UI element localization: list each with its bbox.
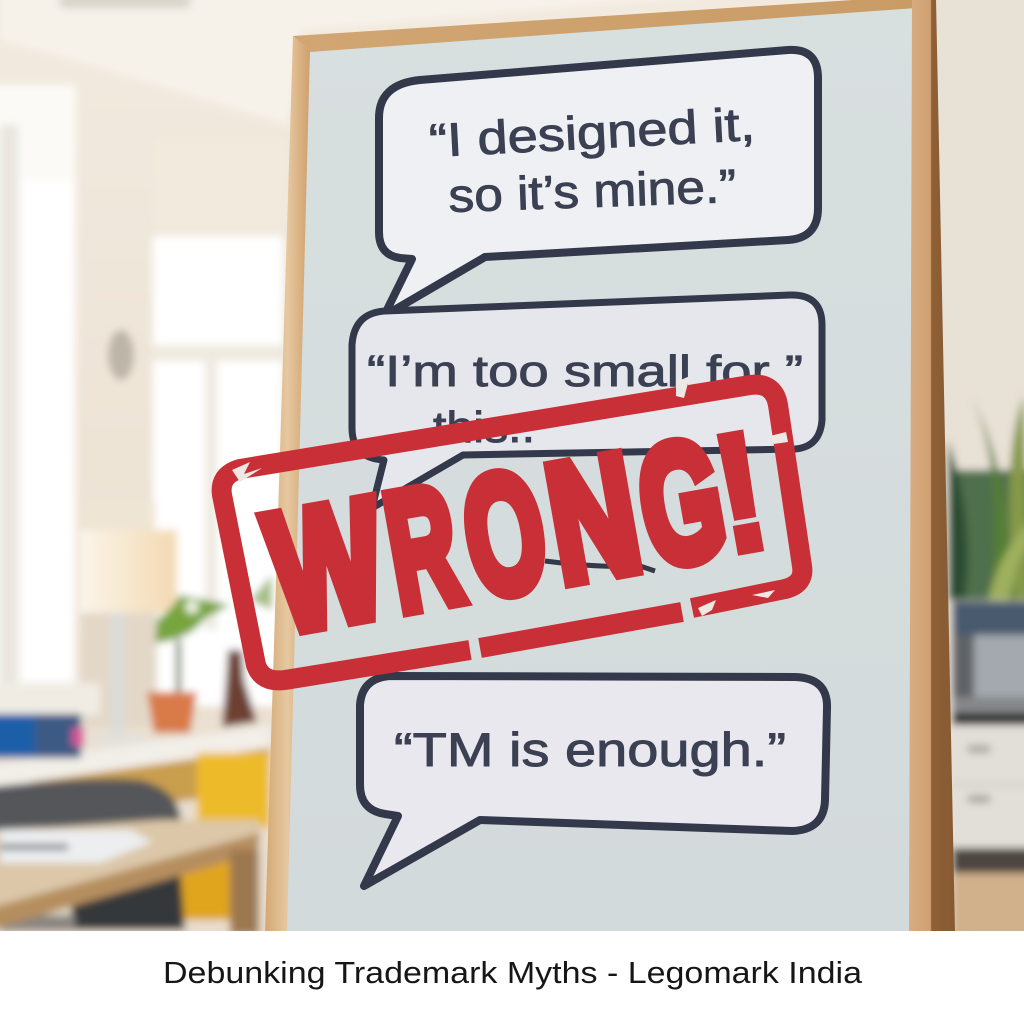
speech bubble 1: so it’s mine.”	[447, 159, 737, 222]
stamp word: N	[535, 418, 652, 618]
speech bubble 3	[360, 676, 827, 886]
speech bubble 1	[379, 50, 818, 316]
dark chair	[0, 779, 181, 830]
stamp word: W	[255, 463, 398, 668]
caption text: Debunking Trademark Myths - Legomark India	[163, 955, 863, 990]
sill	[0, 683, 100, 715]
right wall	[930, 0, 1024, 880]
stamp word	[255, 396, 780, 668]
whiteboard with wooden frame	[265, 0, 955, 932]
frame right	[909, 0, 955, 932]
caption band	[0, 931, 1024, 1024]
stamp word: G	[625, 403, 738, 602]
wood table	[0, 820, 260, 935]
speech bubble 2	[352, 295, 822, 571]
board surface	[286, 8, 914, 932]
ceiling	[0, 0, 884, 125]
wall clock	[108, 330, 134, 380]
right wall plant	[948, 395, 1024, 600]
white desk	[0, 725, 270, 795]
yellow chair	[197, 753, 270, 828]
stamp border	[222, 385, 802, 680]
centre window	[153, 140, 285, 706]
text: “I’m too small for ”	[367, 347, 803, 396]
WRONG stamp	[222, 376, 802, 680]
speech bubble 2: this..	[433, 403, 535, 452]
blue binder	[0, 714, 84, 758]
frame left	[265, 36, 310, 932]
frame top	[293, 0, 916, 52]
stamp word: O	[450, 435, 559, 633]
text: “TM is enough.”	[394, 723, 786, 776]
text: “I designed it,	[428, 97, 756, 167]
left window	[0, 85, 76, 695]
table lamp	[80, 500, 177, 747]
stamp word: R	[373, 450, 473, 647]
right pot and sideboard	[952, 601, 1024, 943]
plant and pots	[147, 575, 272, 733]
stamp word: !	[701, 396, 780, 589]
